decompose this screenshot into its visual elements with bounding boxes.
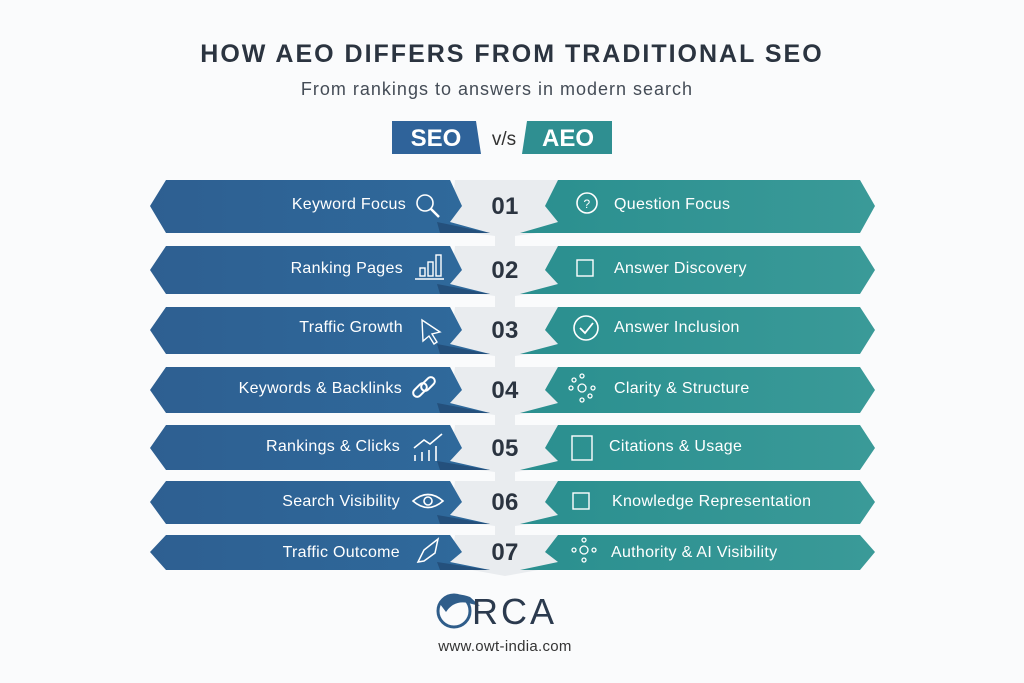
website url: www.owt-india.com bbox=[437, 638, 572, 655]
row 01 bbox=[150, 180, 875, 246]
SEO vs AEO badge bbox=[392, 121, 612, 154]
row 06: Search Visibility bbox=[282, 493, 400, 510]
row 03 bbox=[150, 307, 875, 367]
row 02: 02 bbox=[491, 257, 519, 284]
row 01: Question Focus bbox=[614, 196, 730, 213]
row 03: 03 bbox=[491, 317, 519, 344]
row 06: 06 bbox=[491, 489, 519, 516]
row 06: Knowledge Representation bbox=[612, 493, 811, 510]
row 03: Answer Inclusion bbox=[614, 319, 740, 336]
row 05: Citations & Usage bbox=[609, 438, 742, 455]
SEO vs AEO badge: v/s bbox=[492, 129, 516, 150]
SEO vs AEO badge: SEO bbox=[411, 125, 461, 152]
title: HOW AEO DIFFERS FROM TRADITIONAL SEO bbox=[200, 40, 824, 68]
row 05: Rankings & Clicks bbox=[266, 438, 400, 455]
row 02 bbox=[150, 246, 875, 307]
row 02: Answer Discovery bbox=[614, 260, 747, 277]
SEO vs AEO badge: AEO bbox=[542, 125, 594, 152]
comparison rows bbox=[150, 180, 875, 576]
row 01: 01 bbox=[491, 193, 519, 220]
row 06 bbox=[150, 481, 875, 535]
row 07: Authority & AI Visibility bbox=[611, 544, 777, 561]
row 01: Keyword Focus bbox=[292, 196, 406, 213]
row 01: ? bbox=[584, 197, 591, 211]
row 03: Traffic Growth bbox=[299, 319, 403, 336]
subtitle: From rankings to answers in modern search bbox=[301, 79, 693, 99]
row 02: Ranking Pages bbox=[291, 260, 403, 277]
row 04: Keywords & Backlinks bbox=[239, 380, 402, 397]
row 05 bbox=[150, 425, 875, 481]
row 04: 04 bbox=[491, 377, 519, 404]
row 04 bbox=[150, 367, 875, 425]
row 05: 05 bbox=[491, 435, 519, 462]
row 07 bbox=[150, 535, 875, 576]
logo: ORCA: RCA bbox=[472, 591, 557, 632]
row 07: 07 bbox=[491, 539, 519, 566]
row 04: Clarity & Structure bbox=[614, 380, 750, 397]
row 07: Traffic Outcome bbox=[283, 544, 400, 561]
